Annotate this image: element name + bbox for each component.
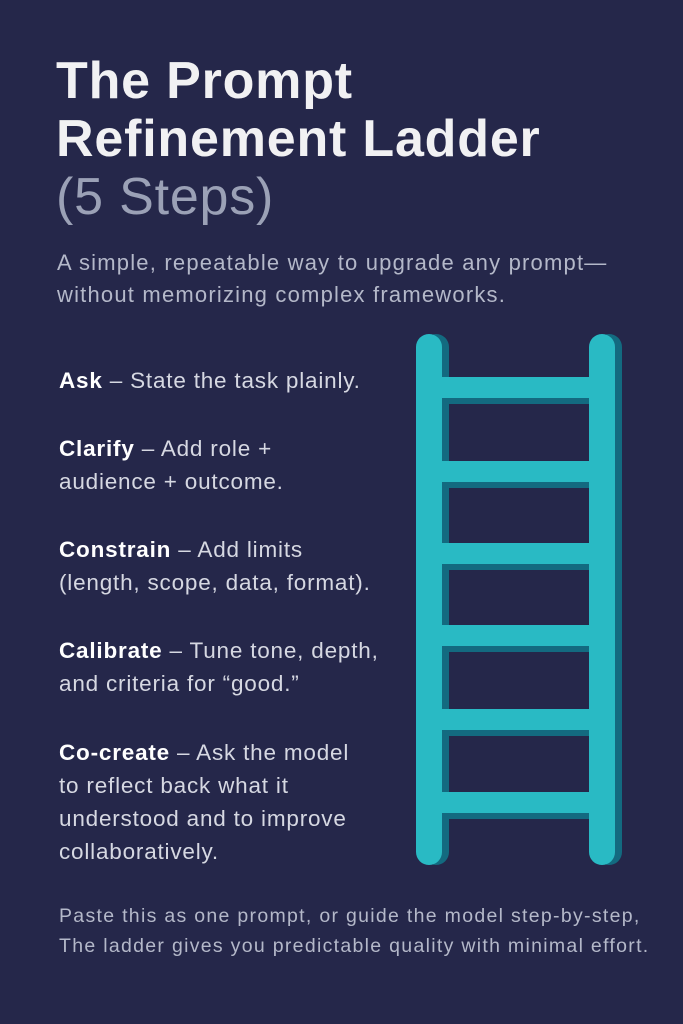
footer note (59, 905, 650, 957)
step: co-create: Co-create – Ask the model (59, 740, 349, 765)
step: constrain (59, 537, 371, 595)
footer note: The ladder gives you predictable quality with minimal effort. (59, 935, 650, 957)
step: co-create: collaboratively. (59, 839, 219, 864)
step: calibrate (59, 638, 379, 696)
title (56, 52, 541, 226)
step: calibrate: and criteria for “good.” (59, 671, 300, 696)
title: The Prompt (56, 52, 353, 110)
step: constrain: (length, scope, data, format). (59, 570, 371, 595)
subtitle: without memorizing complex frameworks. (57, 282, 506, 307)
title: Refinement Ladder (56, 110, 541, 168)
step: co-create (59, 740, 349, 864)
step: clarify (59, 436, 284, 494)
step: clarify: audience + outcome. (59, 469, 284, 494)
step: clarify: Clarify – Add role + (59, 436, 272, 461)
step: co-create: understood and to improve (59, 806, 347, 831)
step: ask: Ask – State the task plainly. (59, 368, 361, 393)
footer note: Paste this as one prompt, or guide the model step-by-step, (59, 905, 641, 927)
subtitle: A simple, repeatable way to upgrade any prompt— (57, 250, 607, 275)
subtitle (57, 250, 607, 307)
title: (5 Steps) (56, 168, 274, 226)
step: co-create: to reflect back what it (59, 773, 289, 798)
step: calibrate: Calibrate – Tune tone, depth, (59, 638, 379, 663)
step: constrain: Constrain – Add limits (59, 537, 303, 562)
